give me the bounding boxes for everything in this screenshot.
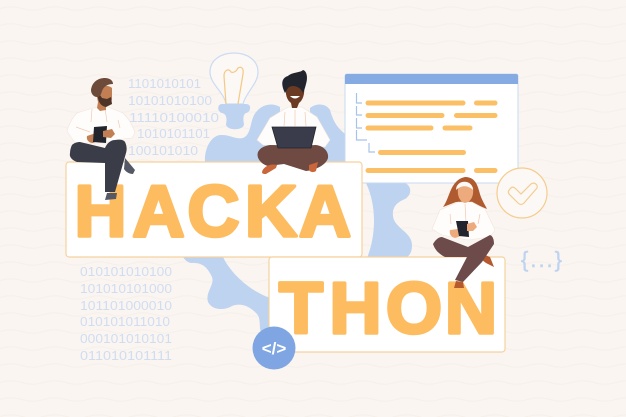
trousers bbox=[433, 235, 494, 282]
binary text bottom bbox=[80, 264, 172, 363]
shirt placket bbox=[450, 204, 480, 224]
binary text top: 1010101101 bbox=[137, 126, 210, 141]
binary text top: 10101010100 bbox=[128, 93, 212, 108]
heading: THON: THON bbox=[279, 269, 497, 349]
beard bbox=[98, 92, 112, 107]
icon: curly braces: {...} bbox=[521, 247, 562, 272]
icon: light bulb bbox=[210, 53, 258, 129]
heading: HACKA: HACKA bbox=[74, 172, 351, 252]
person: woman with laptop bbox=[257, 70, 330, 174]
headband bbox=[456, 182, 473, 190]
panel: HACKA bbox=[66, 162, 362, 257]
window title bar bbox=[345, 74, 518, 84]
binary text top: 1101010101 bbox=[128, 76, 201, 91]
hands and phone bbox=[87, 133, 100, 143]
smile bbox=[290, 96, 300, 98]
shirt placket bbox=[76, 108, 120, 132]
hair bbox=[443, 177, 487, 209]
far foot bbox=[124, 158, 135, 174]
binary text top bbox=[128, 76, 219, 158]
icon: code badge bbox=[252, 326, 296, 370]
shirt bbox=[257, 107, 330, 147]
code window bbox=[345, 74, 518, 183]
person: man with phone bbox=[67, 78, 135, 200]
icon: code badge: </> bbox=[262, 339, 286, 358]
binary text bottom: 010101010100 bbox=[80, 264, 172, 279]
panel: THON bbox=[269, 257, 505, 352]
trousers bbox=[70, 140, 127, 192]
binary text bottom: 101010101000 bbox=[80, 281, 172, 296]
icon: check badge bbox=[497, 168, 547, 218]
binary text bottom: 011010101111 bbox=[80, 348, 172, 363]
gear bbox=[183, 104, 412, 335]
laptop bbox=[272, 127, 316, 148]
shirt bbox=[432, 202, 495, 240]
shoe bbox=[454, 281, 464, 288]
binary text bottom: 000101010101 bbox=[80, 331, 172, 346]
tree brackets bbox=[356, 93, 375, 152]
neck bbox=[97, 102, 106, 111]
hands and phone bbox=[450, 229, 461, 238]
crossed legs bbox=[258, 145, 328, 171]
shirt placket bbox=[284, 110, 306, 126]
far foot bbox=[482, 255, 494, 267]
binary text top: 11110100010 bbox=[129, 110, 219, 125]
hair bbox=[282, 70, 307, 93]
binary text bottom: 101101000010 bbox=[80, 298, 172, 313]
face bbox=[458, 185, 473, 203]
head bbox=[96, 86, 112, 106]
code lines bbox=[366, 100, 498, 173]
hair bbox=[91, 78, 113, 97]
binary text top: 100101010 bbox=[128, 143, 198, 158]
shoe bbox=[105, 193, 117, 200]
head bbox=[286, 86, 304, 108]
person: woman with phone bbox=[432, 177, 495, 288]
binary text bottom: 010101011010 bbox=[80, 314, 170, 329]
shirt bbox=[67, 107, 135, 143]
feet bbox=[262, 164, 277, 174]
